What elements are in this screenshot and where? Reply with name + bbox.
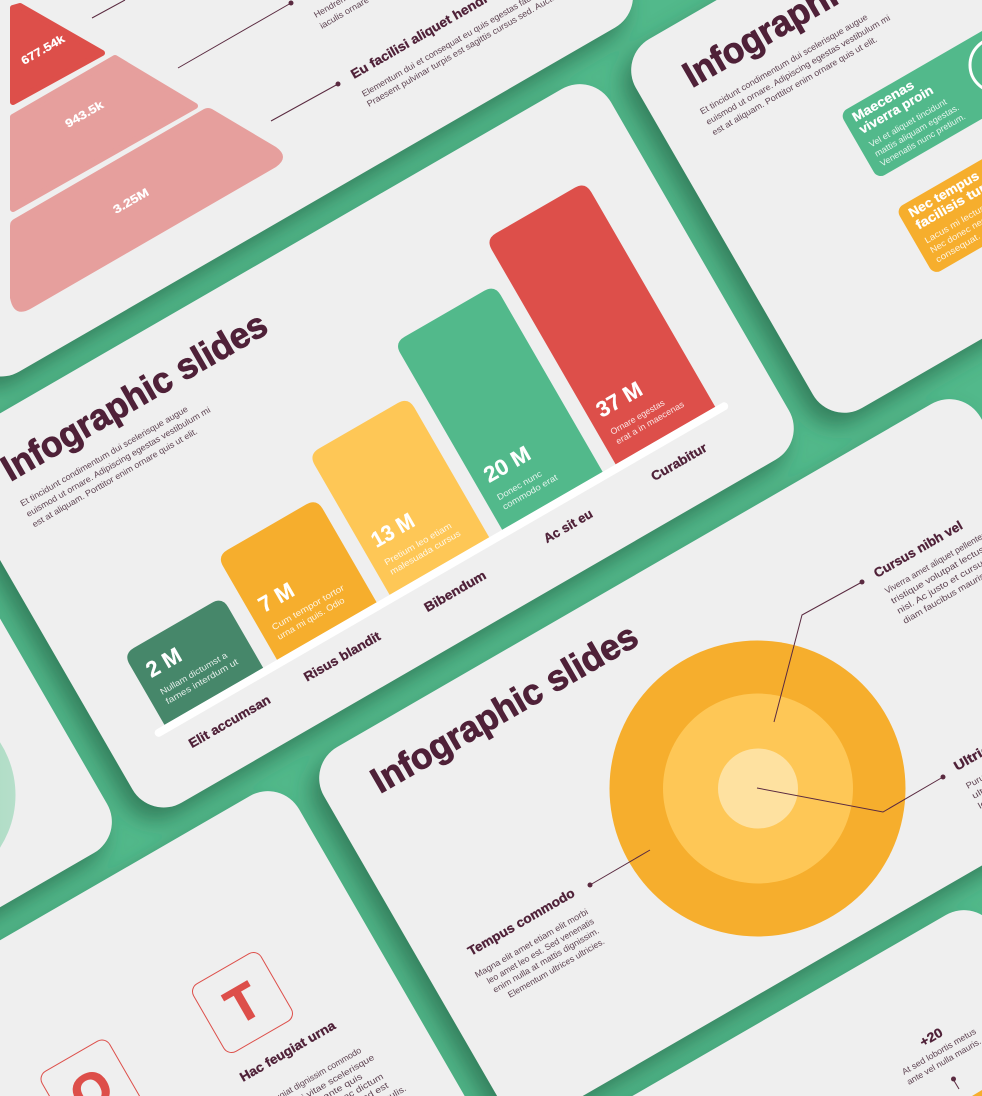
panel: concentric circles slide [306,386,982,1096]
panel: bar chart slide [0,71,807,821]
bar: ac sit eu: Donec nunc [495,468,544,502]
bar: ac sit eu: Ac sit eu [541,506,595,546]
bar: elit accumsan: Nullam dictumst a [158,650,229,697]
orange segment [972,1090,982,1096]
heading: Infographic slides [364,615,645,801]
intro text: est at aliquam. Porttitor enim ornare quis ut elit. [710,34,879,137]
text block: hac feugiat urna [237,1017,408,1096]
bar: elit accumsan: fames interdum ut [164,656,240,706]
green callout: Maecenas [849,77,917,125]
bar: risus blandit: 7 M [254,577,298,617]
text block: tempus commodo [465,885,606,1000]
bar: risus blandit: urna mi quis. Odio [275,595,346,642]
bar: risus blandit: Cum tempor tortor [270,582,346,632]
text block: +20: ante vel nulla mauris. [905,1036,982,1087]
text block: cursus nibh vel: tristique volutpat lectus ac [889,537,982,606]
bar: risus blandit [217,498,395,692]
bar: curabitur [486,182,734,496]
bar: bibendum: malesuada cursus [388,528,463,577]
icon: letter O box [38,1037,144,1096]
text block: tempus commodo: enim nulla at mattis dignissim. [491,926,601,995]
panel: right slide [618,0,982,426]
chart baseline [153,401,730,738]
pyramid middle tier [13,58,195,209]
bar: curabitur: erat a in maecenas [614,399,686,446]
intro text: euismod ut ornare. Adipiscing egestas vestibulum mi [24,405,212,519]
bar: curabitur: 37 M [592,376,647,422]
pyramid middle tier: 943.5k [64,99,106,131]
green callout: Venenatis nunc pretium. [878,111,967,168]
chart: concentric circles [610,640,906,936]
text block: hac feugiat urna: Hac feugiat urna [237,1017,339,1085]
intro text: Et tincidunt condimentum dui scelerisque augue [698,12,870,116]
green callout [840,0,982,179]
text block: ultricies [951,731,982,811]
pyramid bottom tier: 3.25M [112,187,151,217]
text block: tempus commodo: Elementum ultrices ultricies. [506,936,606,1000]
bar chart [23,176,744,763]
icon: letter T box [189,949,296,1056]
icon: white ring [970,38,982,92]
intro text: est at aliquam. Porttitor enim ornare quis ut elit. [30,426,199,529]
green callout: viverra proin [856,82,936,137]
intro text: Et tincidunt condimentum dui scelerisque augue [18,404,190,508]
orange callout [896,84,982,275]
green callout: mattis aliquam egestas. [873,102,961,159]
text block: cursus nibh vel [871,518,982,626]
orange callout: Nec tempus [906,168,982,220]
bar: elit accumsan [123,597,282,757]
text block: tempus commodo: Magna elit amet etiam elit morbi [473,907,590,980]
text block: tempus commodo: leo amet leo est. Sed venenatis [485,916,596,986]
panel: pyramid slide [0,0,646,390]
bar: bibendum: Pretium leo etiam [383,521,453,567]
green callout: Vel et aliquet tincidunt [867,96,949,149]
bar: ac sit eu: 20 M [479,441,535,487]
bar: ac sit eu [394,285,621,562]
bar: risus blandit: Risus blandit [301,628,384,684]
bar: elit accumsan: Elit accumsan [186,692,273,751]
chart: green circle [0,698,16,892]
bar: ac sit eu: commodo erat [501,472,560,512]
bar: bibendum [309,397,508,627]
bar: curabitur: Ornare egestas [609,397,667,437]
text block: tempus commodo: Tempus commodo [465,885,577,959]
leader lines [92,0,340,121]
pyramid top tier: 677.54k [20,33,68,68]
bar: bibendum: 13 M [367,508,419,552]
pyramid bottom tier [10,108,283,312]
pyramid chart [10,6,283,312]
timeline marker [951,1076,959,1089]
panel: letter cards slide [0,778,495,1096]
bar: bibendum: Bibendum [421,567,489,615]
pyramid top tier [13,6,102,102]
panel: left slide with circle [0,464,125,1096]
text block: cursus nibh vel: Cursus nibh vel [871,518,965,581]
intro text: euismod ut ornare. Adipiscing egestas vestibulum mi [704,13,892,127]
heading: Infographic slides [0,303,274,489]
panel: timeline slide [321,897,982,1096]
text block: +20: +20 [917,1025,945,1050]
bar: curabitur: Curabitur [648,440,710,484]
text block: +20: At sed lobortis metus [900,1026,978,1077]
icon: letter T box: T [216,971,270,1035]
bar: elit accumsan: 2 M [141,642,186,682]
leader lines [588,580,946,888]
